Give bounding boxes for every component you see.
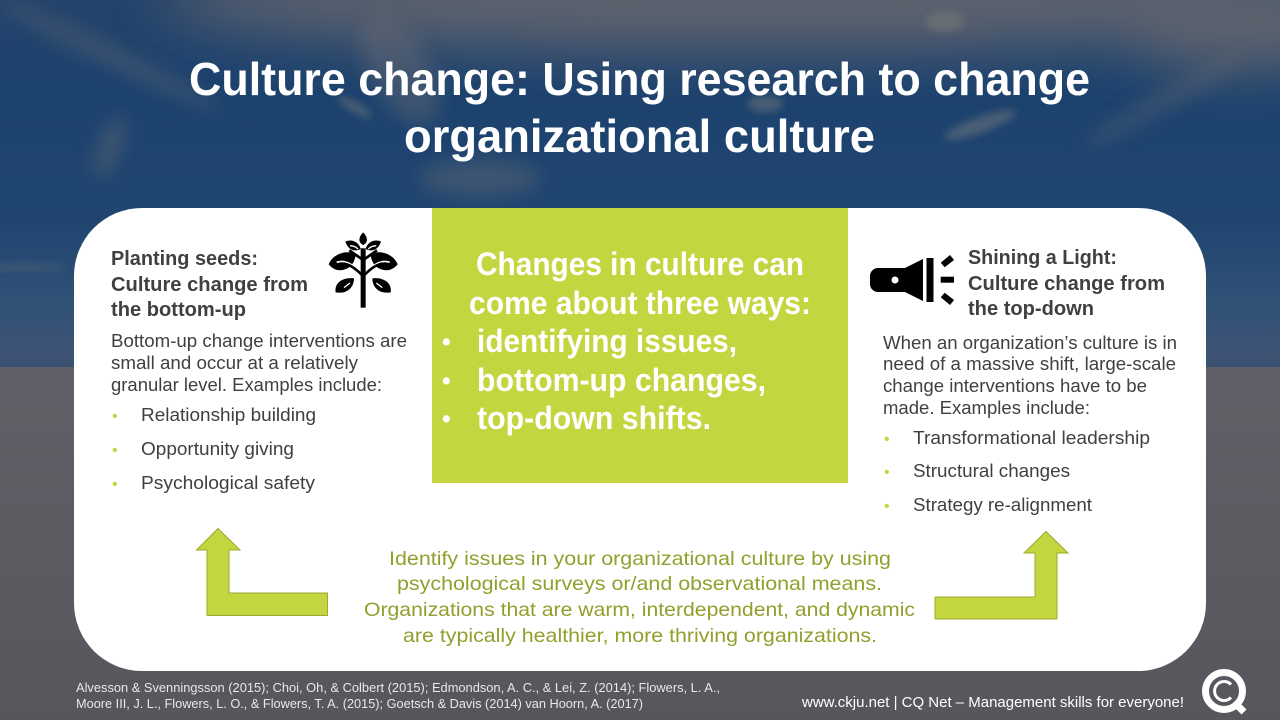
text: top-down intro: need of a massive shift, large-scale bbox=[883, 353, 1176, 374]
list: top-down examples: • bbox=[884, 431, 890, 448]
list: bottom-up examples: Opportunity giving bbox=[141, 438, 294, 459]
icon: flashlight bbox=[870, 255, 954, 305]
panel: centre green box: bottom-up changes, bbox=[477, 362, 766, 398]
panel: centre green box: top-down shifts. bbox=[477, 400, 711, 436]
panel: bottom-up column bbox=[111, 232, 407, 493]
title: Culture change: Using research to change bbox=[189, 53, 1090, 105]
citations: Moore III, J. L., Flowers, L. O., & Flowers, T. A. (2015); Goetsch & Davis (2014) van Hoorn, A. (2017) bbox=[76, 696, 643, 711]
text: identify issues: Organizations that are warm, interdependent, and dynamic bbox=[364, 599, 915, 621]
arrow: right, up to top-down bbox=[935, 532, 1068, 619]
heading: shining a light: the top-down bbox=[968, 298, 1094, 320]
footer credit: www.ckju.net | CQ Net – Management skills for everyone! bbox=[801, 694, 1184, 711]
text: identify issues bbox=[364, 548, 915, 647]
heading: shining a light bbox=[968, 247, 1165, 320]
list: top-down examples: Transformational leadership bbox=[913, 427, 1150, 448]
icon: tree bbox=[329, 232, 398, 308]
white rounded panel bbox=[74, 208, 1206, 671]
panel: centre green box: identifying issues, bbox=[477, 323, 737, 359]
list: bottom-up examples: Psychological safety bbox=[141, 472, 316, 493]
list: bottom-up examples: Relationship building bbox=[141, 404, 316, 425]
panel: centre green box: • bbox=[442, 367, 451, 395]
list: top-down examples: Strategy re-alignment bbox=[913, 494, 1092, 515]
heading: planting seeds bbox=[111, 248, 308, 321]
text: identify issues: Identify issues in your organizational culture by using bbox=[389, 548, 891, 570]
heading: shining a light: Shining a Light: bbox=[968, 247, 1117, 269]
heading: shining a light: Culture change from bbox=[968, 273, 1165, 295]
text: bottom-up intro: granular level. Examples include: bbox=[111, 374, 382, 395]
text: identify issues: psychological surveys or/and observational means. bbox=[397, 573, 882, 595]
icon: CQ logo bbox=[1206, 672, 1244, 712]
text: top-down intro: When an organization’s culture is in bbox=[883, 332, 1177, 353]
panel: centre green box: Changes in culture can bbox=[476, 246, 804, 282]
title bbox=[189, 53, 1090, 162]
panel: centre green box: come about three ways: bbox=[469, 285, 811, 321]
list: top-down examples: • bbox=[884, 464, 890, 481]
panel: top-down column bbox=[870, 247, 1177, 515]
heading: planting seeds: the bottom-up bbox=[111, 299, 246, 321]
list: bottom-up examples: • bbox=[112, 476, 118, 493]
list: top-down examples: Structural changes bbox=[913, 460, 1070, 481]
heading: planting seeds: Culture change from bbox=[111, 274, 308, 296]
citations: Alvesson & Svenningsson (2015); Choi, Oh, & Colbert (2015); Edmondson, A. C., & Lei, Z. (2014); Flowers, L. A., bbox=[76, 680, 720, 695]
arrow: left, up to bottom-up bbox=[196, 528, 328, 616]
panel: centre green box bbox=[432, 208, 848, 483]
text: bottom-up intro bbox=[111, 330, 407, 395]
panel: centre green box: • bbox=[442, 405, 451, 433]
citations bbox=[76, 680, 720, 711]
heading: planting seeds: Planting seeds: bbox=[111, 248, 258, 270]
list: top-down examples bbox=[884, 427, 1150, 515]
list: top-down examples: • bbox=[884, 498, 890, 515]
list: bottom-up examples: • bbox=[112, 442, 118, 459]
text: top-down intro: change interventions have to be bbox=[883, 375, 1147, 396]
list: bottom-up examples bbox=[112, 404, 316, 493]
text: top-down intro bbox=[883, 332, 1177, 418]
title: organizational culture bbox=[404, 110, 875, 162]
text: top-down intro: made. Examples include: bbox=[883, 397, 1090, 418]
text: bottom-up intro: small and occur at a relatively bbox=[111, 352, 359, 373]
text: bottom-up intro: Bottom-up change interventions are bbox=[111, 330, 407, 351]
text: identify issues: are typically healthier, more thriving organizations. bbox=[403, 625, 877, 647]
panel: centre green box: • bbox=[442, 328, 451, 356]
list: bottom-up examples: • bbox=[112, 408, 118, 425]
